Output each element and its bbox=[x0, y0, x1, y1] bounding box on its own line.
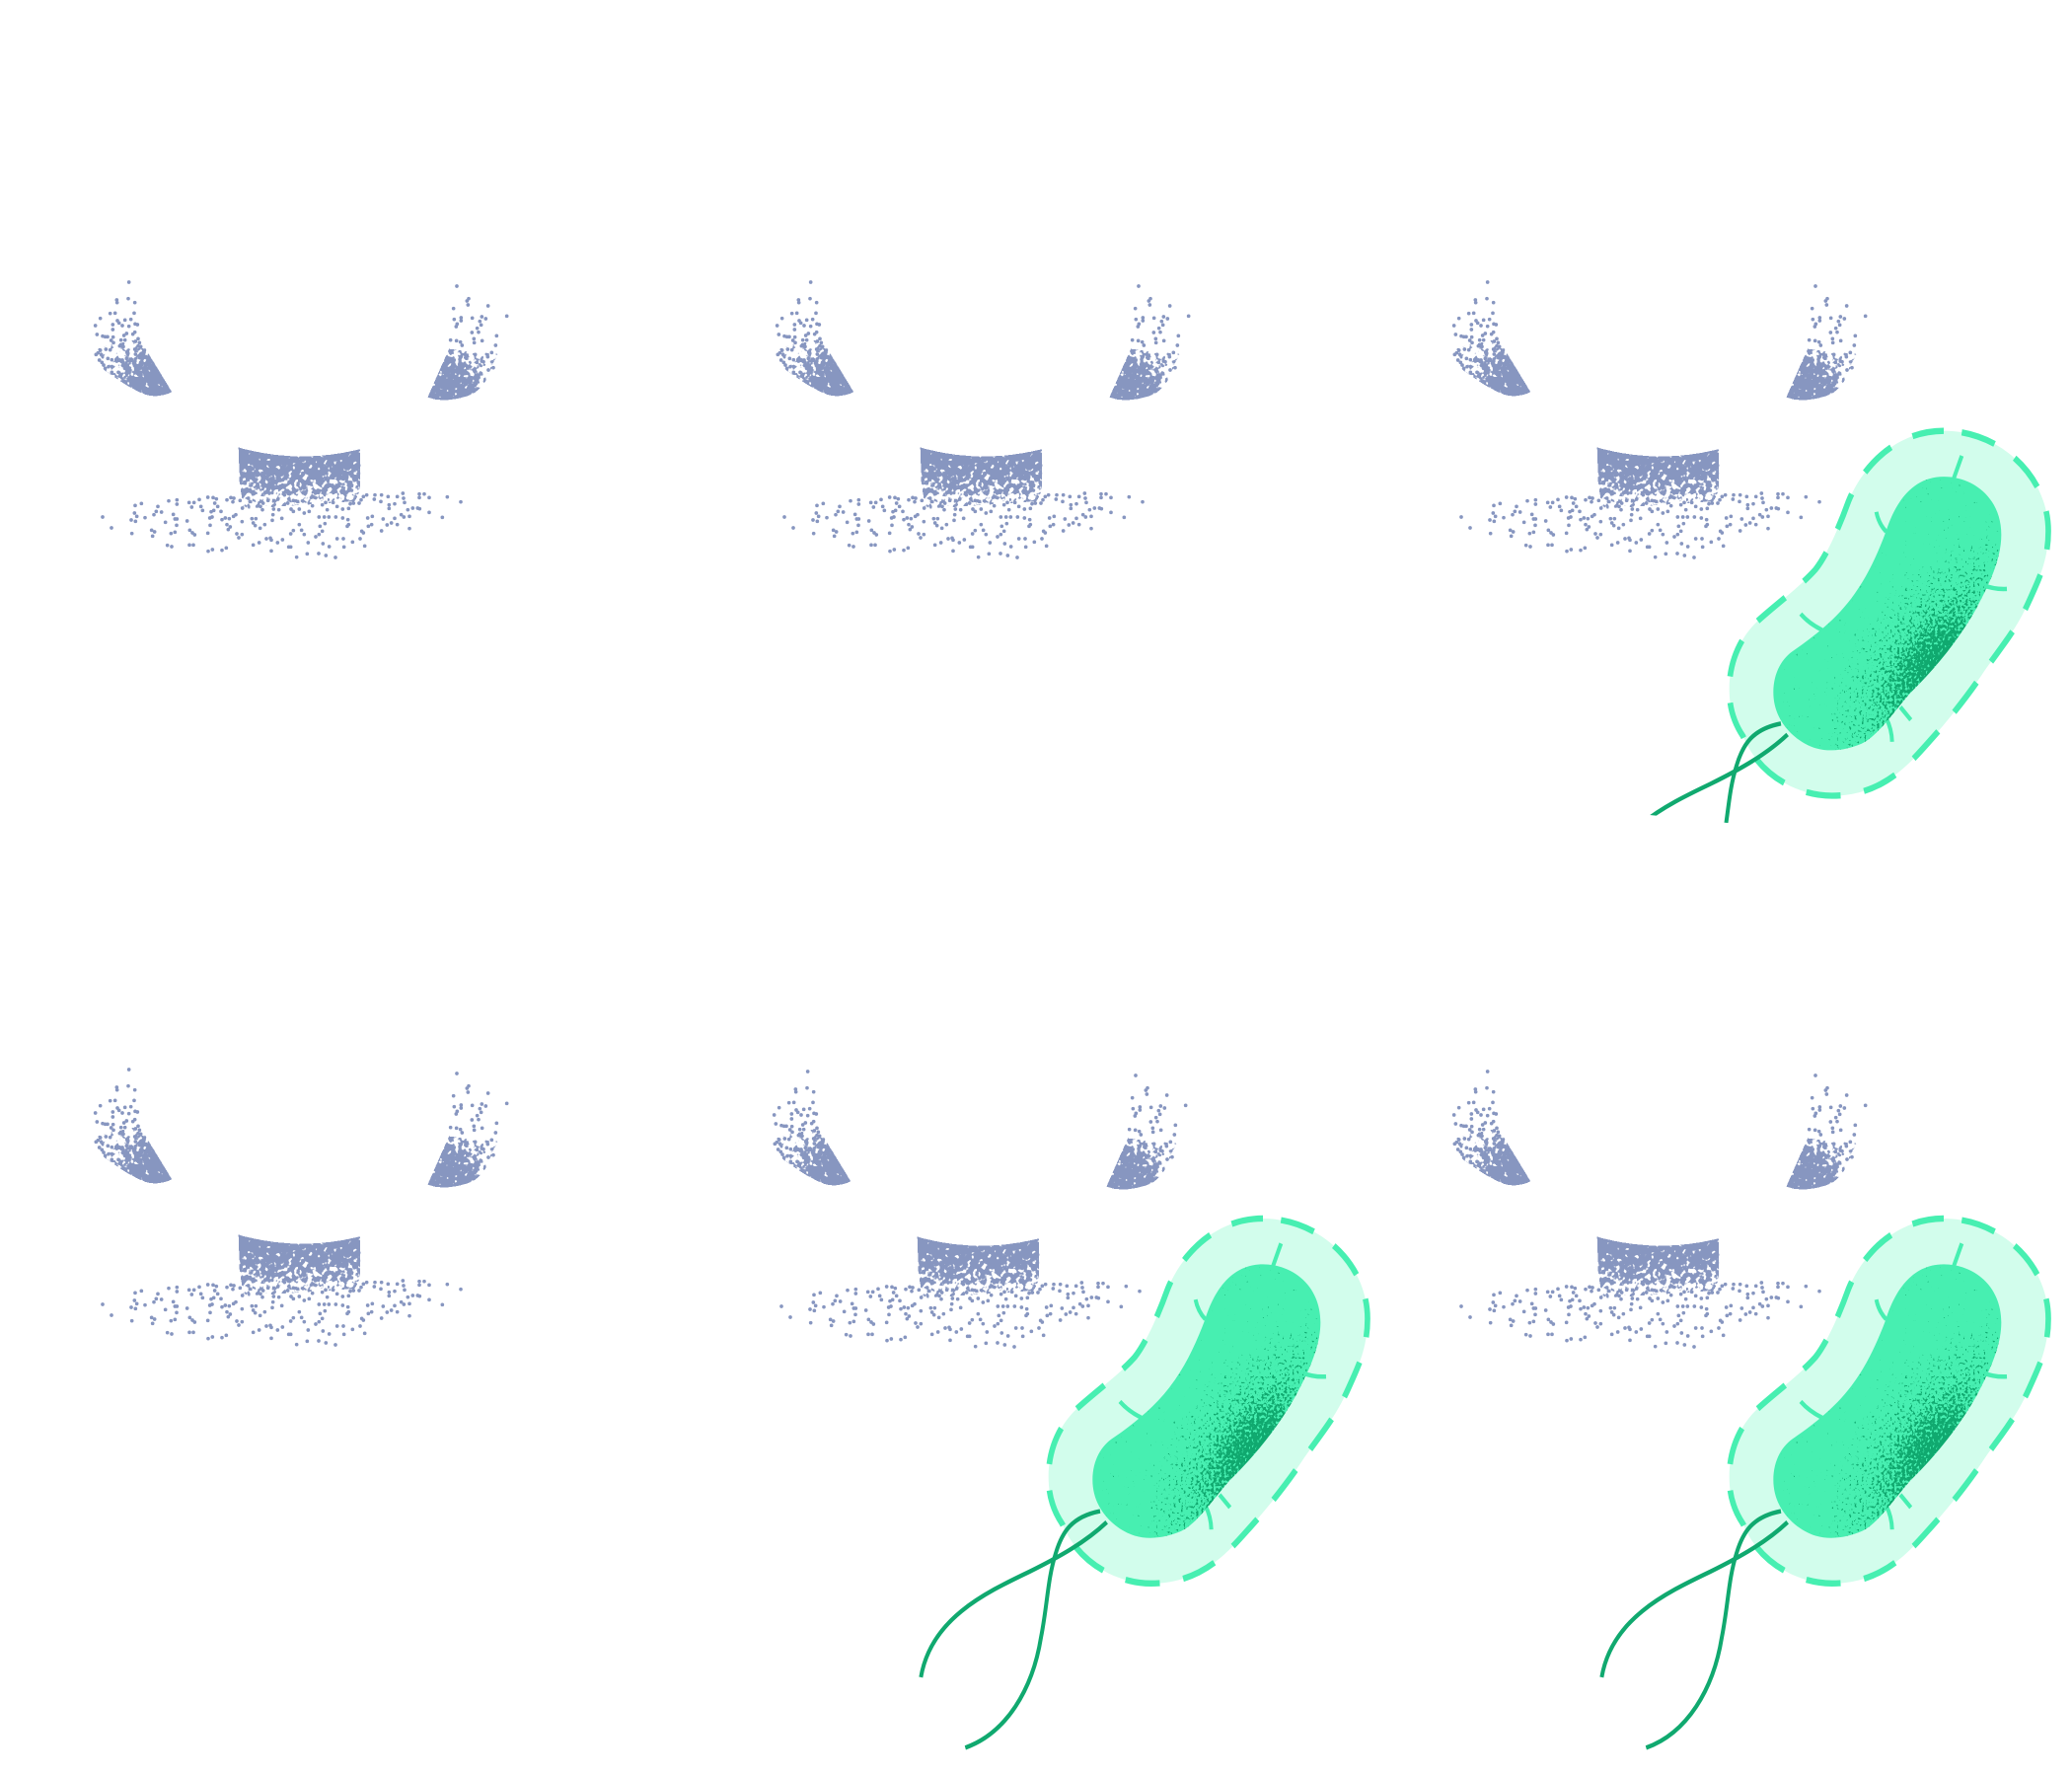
particle cluster: bottom right bbox=[1450, 1072, 1866, 1347]
bacterium: bottom right bbox=[1601, 1219, 2048, 1747]
particle cluster: bottom left bbox=[92, 1070, 507, 1345]
particle cluster: top right bbox=[1450, 282, 1866, 557]
bacterium: top right bbox=[1650, 428, 2051, 823]
bacterium: bottom middle bbox=[921, 1219, 1368, 1747]
particle cluster: top left bbox=[92, 282, 507, 557]
particle cluster: bottom middle bbox=[771, 1072, 1186, 1347]
particle cluster: top middle bbox=[774, 282, 1189, 557]
